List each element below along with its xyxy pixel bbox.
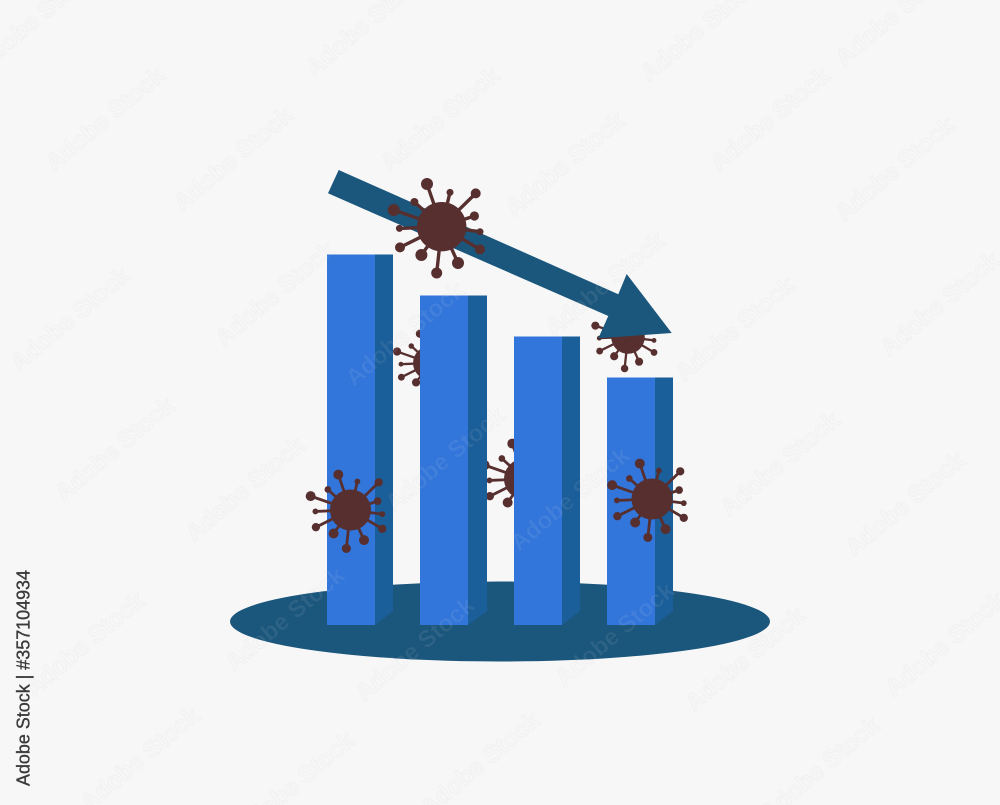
bar 2 <box>420 296 487 625</box>
watermark pattern: Adobe Stock <box>715 406 846 522</box>
bar chart <box>327 254 673 625</box>
watermark pattern: Adobe Stock <box>380 401 511 517</box>
ground ellipse <box>230 582 770 662</box>
stock id vertical caption: Adobe Stock | #357104934 <box>12 570 34 786</box>
watermark pattern: Adobe Stock <box>220 561 351 677</box>
watermark pattern: Adobe Stock <box>20 586 151 702</box>
watermark pattern: Adobe Stock <box>210 236 341 352</box>
watermark pattern: Adobe Stock <box>705 61 836 177</box>
watermark pattern: Adobe Stock <box>680 601 811 717</box>
large virus on arrow <box>388 178 485 278</box>
virus on fourth bar <box>607 459 688 542</box>
watermark pattern: Adobe Stock <box>40 61 171 177</box>
watermark pattern: Adobe Stock <box>340 276 471 392</box>
virus under arrow head <box>591 304 657 372</box>
watermark pattern: Adobe Stock <box>540 226 671 342</box>
virus on first bar <box>306 470 386 553</box>
bar 1 <box>327 254 393 625</box>
watermark pattern: Adobe Stock <box>550 576 681 692</box>
watermark pattern: Adobe Stock <box>670 271 801 387</box>
watermark pattern: Adobe Stock <box>180 431 311 547</box>
bar 4 <box>607 378 673 625</box>
watermark pattern: Adobe Stock <box>830 111 961 227</box>
bar 3 <box>514 336 580 625</box>
watermark pattern: Adobe Stock <box>50 391 181 507</box>
watermark pattern: Adobe Stock <box>500 106 631 222</box>
watermark pattern: Adobe Stock <box>168 101 299 217</box>
watermark pattern: Adobe Stock <box>5 261 136 377</box>
watermark pattern: Adobe Stock <box>505 441 636 557</box>
watermark pattern: Adobe Stock <box>375 61 506 177</box>
virus behind second bar <box>393 330 460 399</box>
watermark pattern: Adobe Stock <box>840 446 971 562</box>
downward arrow <box>328 170 672 338</box>
watermark pattern: Adobe Stock <box>350 591 481 707</box>
virus behind third bar <box>480 439 560 522</box>
